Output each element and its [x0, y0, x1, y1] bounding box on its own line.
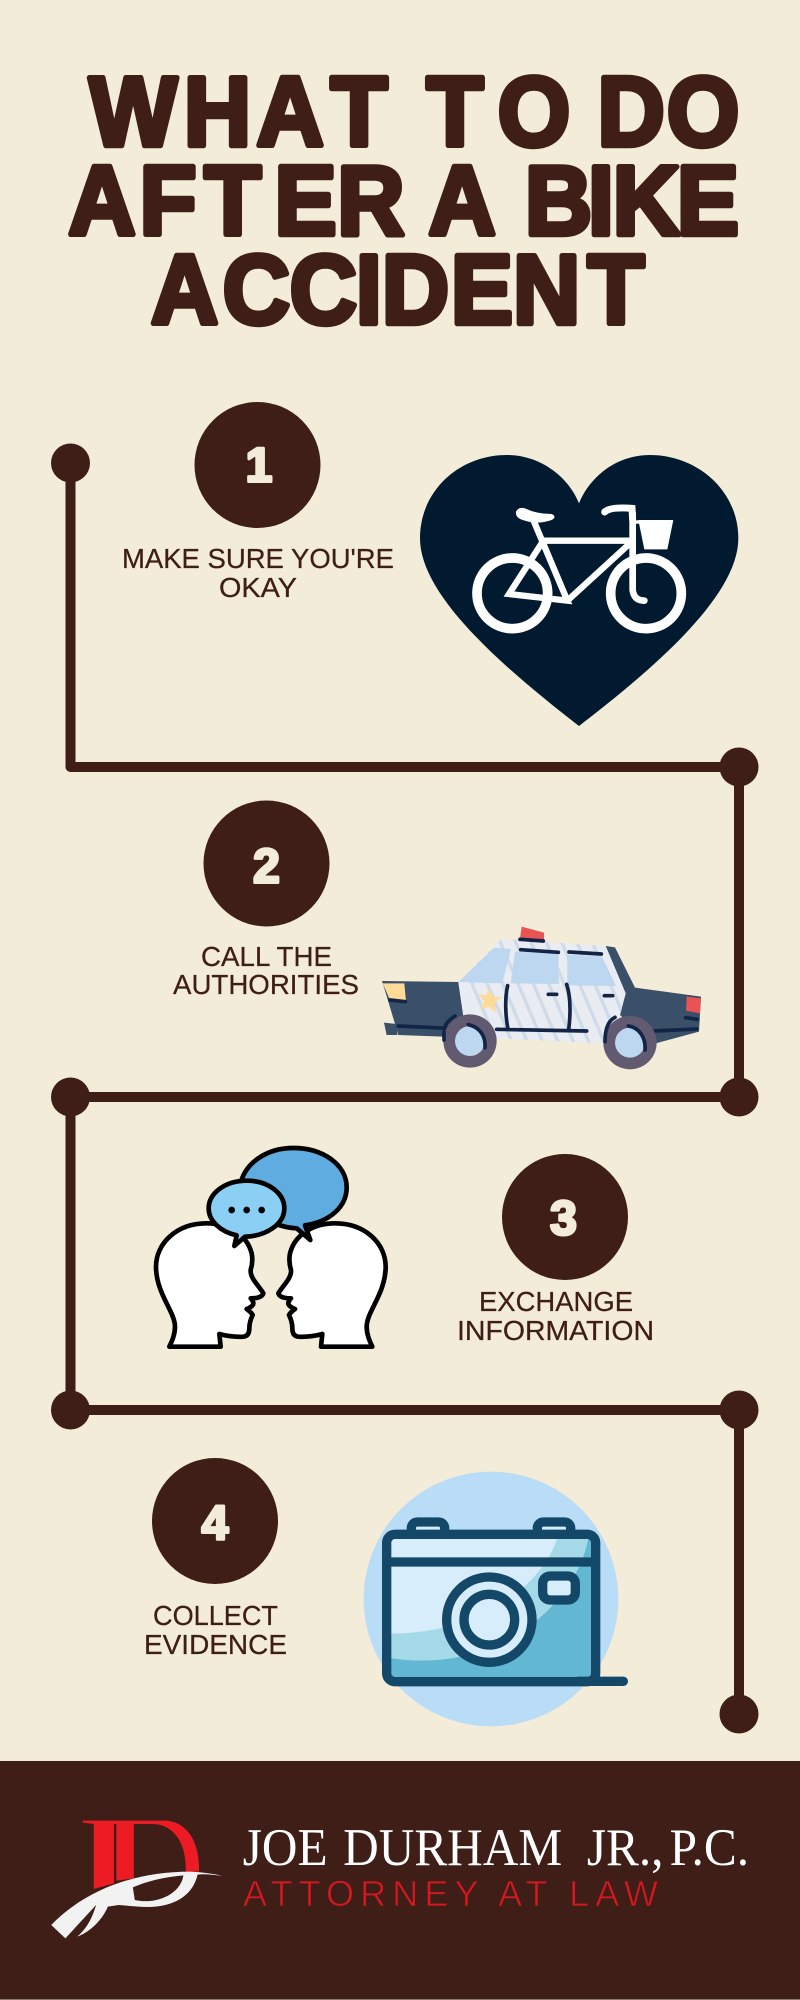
- firm name: JOE: [243, 1818, 328, 1877]
- step 2 label: CALL THE: [201, 941, 332, 972]
- step 3 label: INFORMATION: [457, 1315, 654, 1346]
- icon: two heads talking: [156, 1148, 386, 1347]
- step 1 number badge: [194, 402, 320, 528]
- step 3 label: EXCHANGE: [479, 1286, 633, 1317]
- step 2 label: [173, 941, 359, 1000]
- firm name: [243, 1818, 749, 1877]
- step 2 number badge: [204, 800, 330, 926]
- footer band: [0, 1761, 800, 2000]
- step 4 number badge: 4: [202, 1498, 229, 1550]
- firm name: P.C.: [670, 1818, 749, 1877]
- logo mark: JD: [51, 1821, 223, 1938]
- title: [68, 57, 739, 345]
- small speech bubble: [209, 1181, 284, 1246]
- step 1 label: MAKE SURE YOU'RE: [122, 543, 394, 574]
- step 4 number badge: [152, 1458, 278, 1584]
- step 4 label: COLLECT: [153, 1600, 278, 1631]
- large speech bubble: [240, 1148, 347, 1240]
- icon: camera: [364, 1472, 623, 1726]
- step 4 label: EVIDENCE: [144, 1629, 287, 1660]
- dots: [228, 1207, 265, 1213]
- right head: [278, 1223, 386, 1347]
- title: AFTER A BIKE: [68, 146, 739, 256]
- icon: bicycle in heart: [420, 455, 738, 726]
- connector path with dots: [51, 444, 758, 1734]
- step 2 label: AUTHORITIES: [173, 969, 359, 1000]
- step 3 number badge: 3: [550, 1192, 577, 1246]
- step 3 number badge: [502, 1154, 628, 1280]
- firm name: DURHAM: [343, 1818, 562, 1877]
- left head: [156, 1223, 263, 1347]
- step 4 label: [144, 1600, 287, 1660]
- step 2 number badge: 2: [253, 840, 280, 894]
- title: WHAT TO DO: [89, 57, 739, 167]
- step 1 label: OKAY: [219, 572, 297, 603]
- title: ACCIDENT: [151, 235, 644, 345]
- step 3 label: [457, 1286, 654, 1346]
- step 1 label: [122, 543, 394, 603]
- firm name: JR.,: [587, 1818, 664, 1877]
- step 1 number badge: 1: [246, 440, 272, 492]
- firm tagline: ATTORNEY AT LAW: [243, 1873, 658, 1914]
- icon: police car: [382, 927, 701, 1069]
